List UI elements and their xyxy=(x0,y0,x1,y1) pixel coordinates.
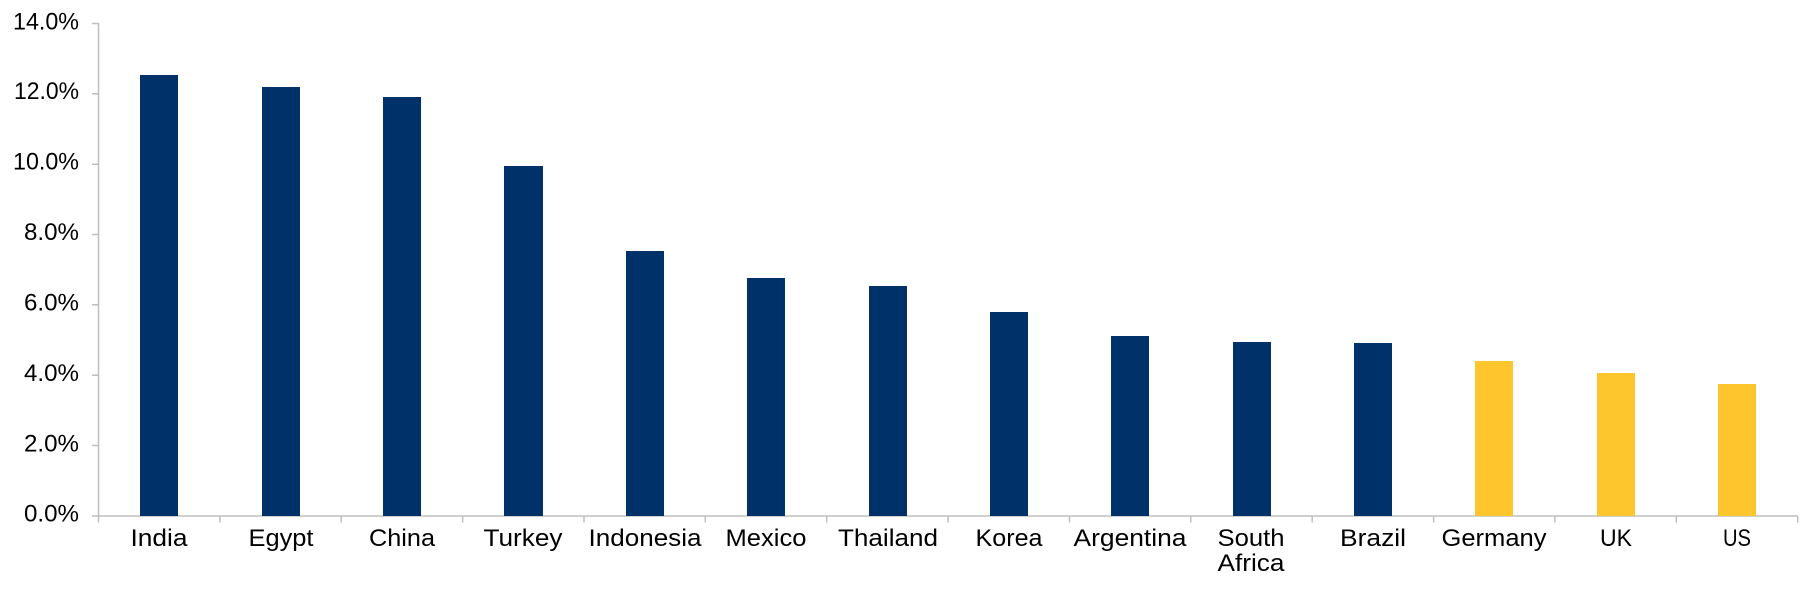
bars: emerging markets xyxy=(140,75,1392,516)
x axis labels: Argentina xyxy=(1074,525,1187,552)
x axis labels: Mexico xyxy=(726,525,806,552)
y axis labels: 6.0% xyxy=(24,290,79,316)
x axis labels: Indonesia xyxy=(588,525,702,552)
x axis labels: South xyxy=(1218,525,1284,552)
x axis labels: India xyxy=(130,525,188,552)
y axis labels: 4.0% xyxy=(24,360,79,387)
x axis labels xyxy=(130,525,1751,577)
y axis labels: 8.0% xyxy=(24,219,79,246)
y axis labels xyxy=(13,8,79,528)
x axis labels: Africa xyxy=(1218,550,1285,577)
y axis labels: 10.0% xyxy=(13,148,79,176)
y axis labels: 12.0% xyxy=(14,78,79,105)
bars: developed markets xyxy=(1475,361,1756,516)
x axis labels: Thailand xyxy=(838,525,938,552)
x axis labels: China xyxy=(369,525,436,552)
x axis labels: Germany xyxy=(1442,525,1546,552)
y axis labels: 2.0% xyxy=(24,430,79,458)
y axis labels: 0.0% xyxy=(24,500,79,528)
x axis labels: UK xyxy=(1600,525,1632,552)
y axis labels: 14.0% xyxy=(13,8,79,36)
x axis labels: Turkey xyxy=(484,525,562,552)
x axis labels: Brazil xyxy=(1340,525,1406,552)
x axis labels: Korea xyxy=(976,525,1043,552)
x axis labels: Egypt xyxy=(248,525,314,552)
x axis labels: US xyxy=(1723,525,1751,552)
